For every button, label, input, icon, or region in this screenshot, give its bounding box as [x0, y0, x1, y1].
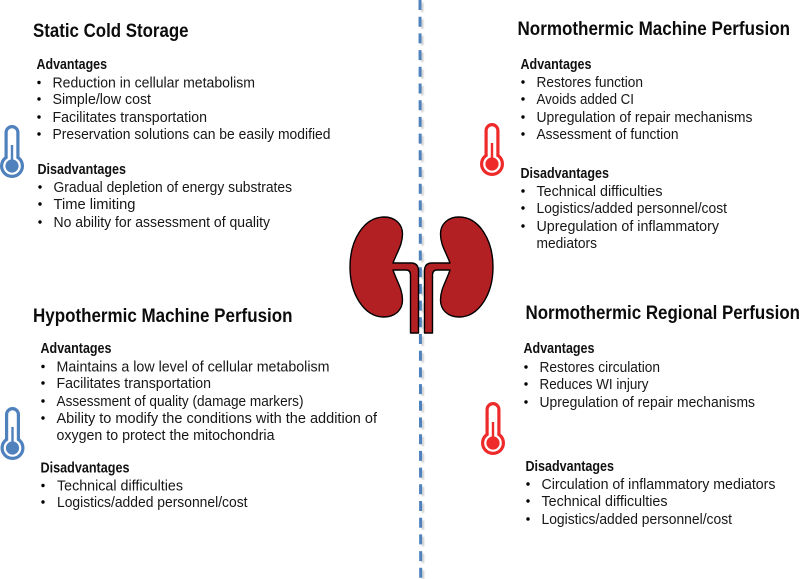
- disadvantages list: [40, 460, 248, 511]
- advantages list: Advantages: [520, 57, 592, 73]
- advantages list: Restores circulation: [540, 360, 660, 376]
- icon: blue thermometer: [2, 127, 22, 176]
- advantages list: Upregulation of repair mechanisms: [540, 395, 755, 411]
- disadvantages list: Logistics/added personnel/cost: [536, 201, 727, 217]
- panel: hypothermic machine perfusion: [2, 306, 378, 511]
- advantages list: Maintains a low level of cellular metabolism: [56, 360, 330, 376]
- advantages list: [524, 341, 755, 411]
- advantages list: Facilitates transportation: [56, 376, 211, 392]
- disadvantages list: Logistics/added personnel/cost: [542, 512, 732, 528]
- panel: normothermic machine perfusion: [482, 19, 790, 252]
- disadvantages list: [38, 162, 292, 231]
- advantages list: Ability to modify the conditions with the addition of: [56, 411, 378, 427]
- panel: static cold storage: [2, 21, 330, 231]
- dashed vertical divider: [420, 0, 423, 579]
- advantages list: [36, 57, 330, 143]
- icon: red thermometer: [483, 404, 503, 453]
- heading: static cold storage: Static Cold Storage: [33, 21, 188, 42]
- advantages list: oxygen to protect the mitochondria: [56, 428, 275, 444]
- advantages list: Preservation solutions can be easily modified: [52, 127, 330, 143]
- disadvantages list: Disadvantages: [40, 460, 130, 476]
- advantages list: Upregulation of repair mechanisms: [536, 110, 752, 126]
- disadvantages list: Logistics/added personnel/cost: [57, 495, 248, 511]
- heading: hypothermic machine perfusion: Hypothermic Machine Perfusion: [33, 306, 292, 327]
- disadvantages list: Upregulation of inflammatory: [536, 219, 720, 235]
- disadvantages list: Time limiting: [54, 197, 136, 213]
- disadvantages list: [520, 166, 727, 252]
- panel: normothermic regional perfusion: [483, 303, 800, 528]
- icon: red thermometer: [482, 125, 502, 174]
- advantages list: Restores function: [536, 75, 643, 91]
- advantages list: Assessment of function: [536, 127, 678, 143]
- icon: blue thermometer: [2, 409, 23, 458]
- advantages list: Advantages: [36, 57, 107, 73]
- disadvantages list: [526, 459, 776, 528]
- advantages list: [520, 57, 752, 143]
- disadvantages list: mediators: [536, 236, 597, 252]
- advantages list: Simple/low cost: [52, 92, 151, 108]
- disadvantages list: Technical difficulties: [57, 478, 183, 494]
- disadvantages list: Disadvantages: [526, 459, 614, 475]
- advantages list: [40, 341, 378, 444]
- advantages list: Assessment of quality (damage markers): [56, 394, 304, 410]
- disadvantages list: Gradual depletion of energy substrates: [54, 180, 292, 196]
- disadvantages list: Disadvantages: [38, 162, 126, 178]
- advantages list: Facilitates transportation: [52, 110, 207, 126]
- advantages list: Advantages: [524, 341, 594, 357]
- disadvantages list: Circulation of inflammatory mediators: [542, 477, 776, 493]
- disadvantages list: Disadvantages: [520, 166, 609, 182]
- advantages list: Reduction in cellular metabolism: [52, 76, 255, 92]
- advantages list: Avoids added CI: [536, 92, 634, 108]
- disadvantages list: Technical difficulties: [536, 184, 662, 200]
- advantages list: Reduces WI injury: [540, 377, 649, 393]
- disadvantages list: Technical difficulties: [542, 494, 668, 510]
- disadvantages list: No ability for assessment of quality: [54, 215, 271, 231]
- advantages list: Advantages: [40, 341, 112, 357]
- icon: kidneys with ureters: [350, 217, 493, 333]
